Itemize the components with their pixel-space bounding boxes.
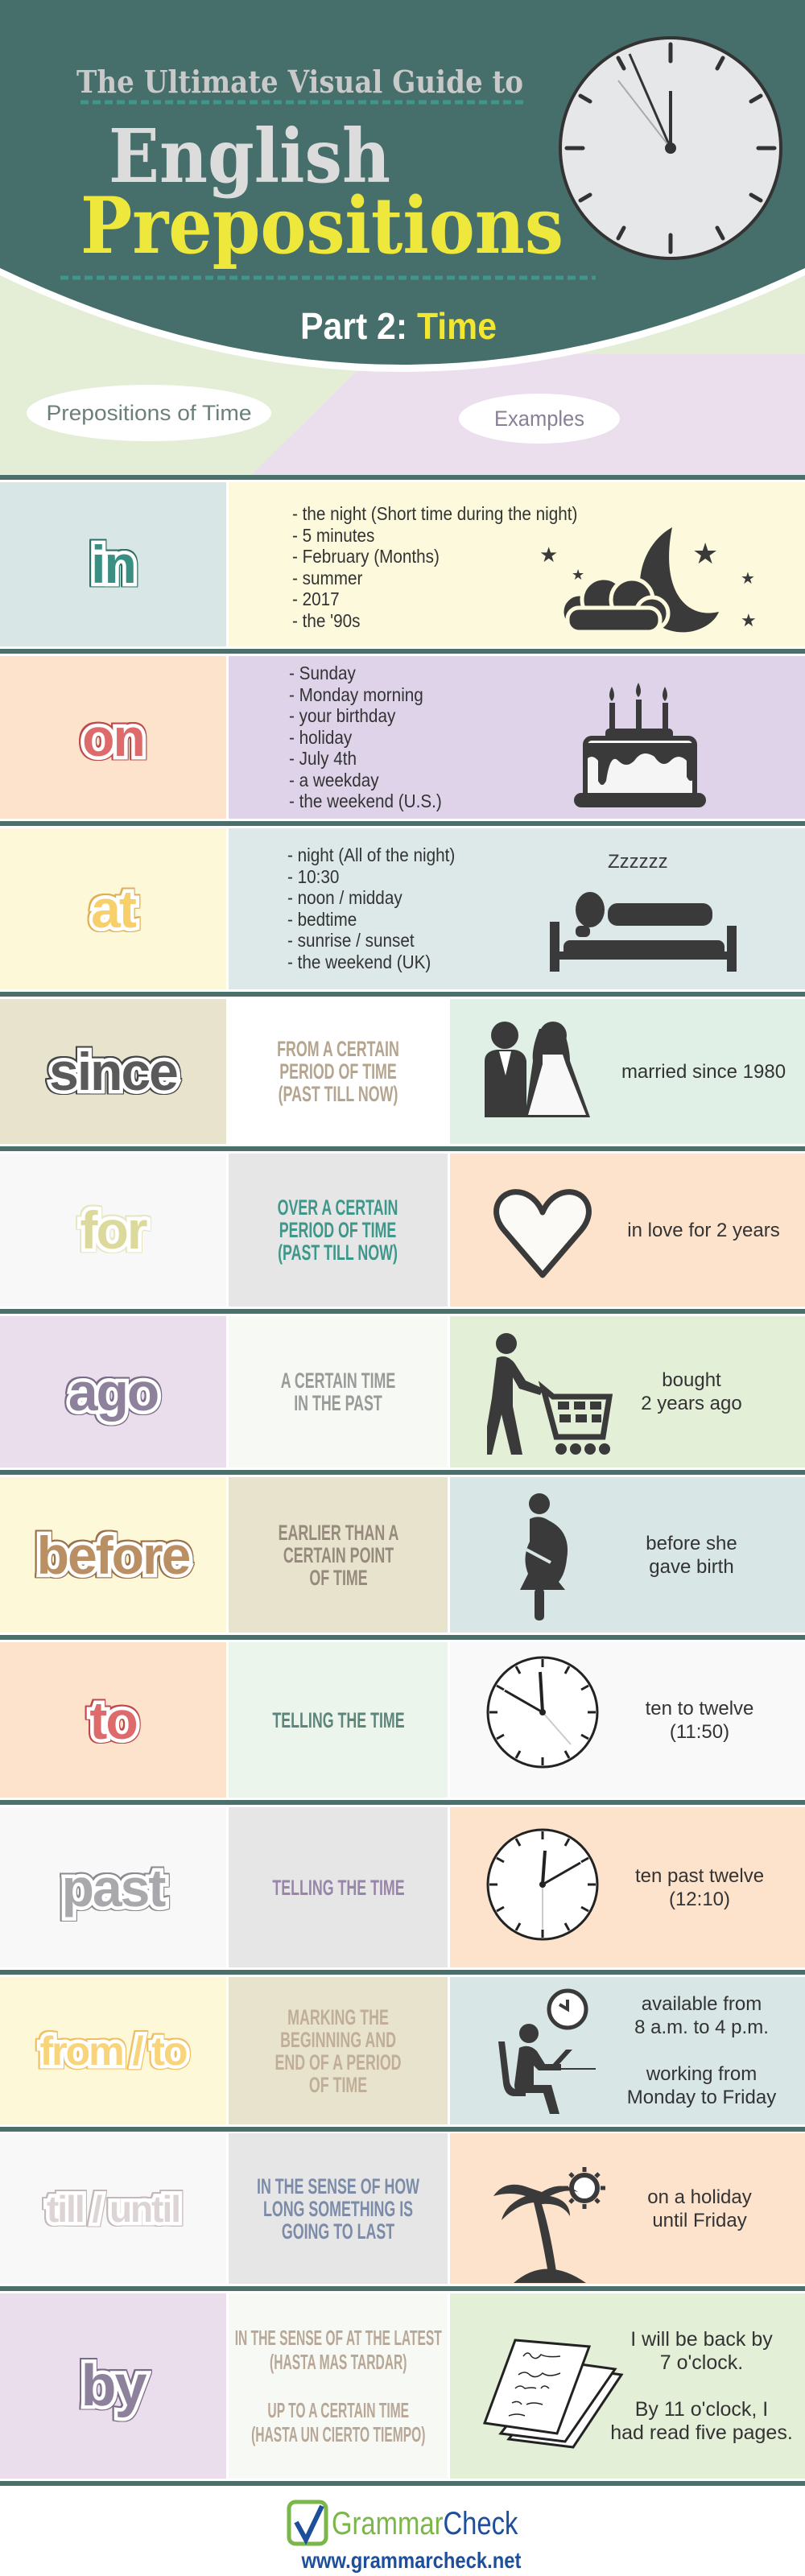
examples list: in: - 2017 bbox=[292, 588, 340, 609]
footer logo bbox=[287, 2500, 522, 2573]
word: at: at bbox=[91, 879, 135, 939]
examples list: at: - noon / midday bbox=[287, 887, 402, 908]
definition: ago: A CERTAIN TIME bbox=[281, 1368, 395, 1393]
definition: for bbox=[229, 1154, 448, 1307]
pill: Examples bbox=[459, 394, 620, 444]
definition: ago: IN THE PAST bbox=[294, 1391, 382, 1415]
example: from / to: working from bbox=[646, 2063, 757, 2085]
row: till / until bbox=[42, 2133, 805, 2284]
word: from / to bbox=[0, 1977, 226, 2124]
definition: till / until: LONG SOMETHING IS bbox=[263, 2196, 413, 2220]
examples list: at: - sunrise / sunset bbox=[287, 930, 415, 951]
brand name: GrammarCheck bbox=[332, 2506, 518, 2541]
row: from / to bbox=[0, 1977, 805, 2124]
definition: till / until bbox=[229, 2133, 448, 2284]
examples list: at: - the weekend (UK) bbox=[287, 952, 431, 972]
icon: man with shopping cart bbox=[487, 1333, 613, 1455]
example: till / until bbox=[450, 2133, 805, 2284]
word: in bbox=[0, 482, 226, 646]
definition: before: OF TIME bbox=[309, 1565, 367, 1589]
example: from / to: Monday to Friday bbox=[627, 2087, 776, 2108]
example: by: 7 o'clock. bbox=[660, 2351, 743, 2373]
example: by: I will be back by bbox=[630, 2328, 773, 2351]
word: by bbox=[0, 2293, 226, 2479]
word: past bbox=[0, 1807, 226, 1967]
example: ago: 2 years ago bbox=[641, 1393, 742, 1414]
row: for bbox=[76, 1154, 805, 1307]
icon: moon and cloud: ★ bbox=[741, 570, 755, 588]
title: English: English bbox=[109, 113, 390, 200]
word: at bbox=[0, 828, 226, 989]
title: Prepositions: Prepositions bbox=[80, 180, 564, 271]
icon: clock 11:50 bbox=[486, 1657, 599, 1768]
example: for bbox=[450, 1154, 805, 1307]
word: from / to: from / to bbox=[40, 2029, 186, 2074]
definition: to: TELLING THE TIME bbox=[272, 1708, 404, 1732]
header bbox=[0, 0, 805, 475]
definition: since: (PAST TILL NOW) bbox=[279, 1082, 398, 1106]
definition: ago bbox=[229, 1316, 448, 1468]
definition: since: FROM A CERTAIN bbox=[277, 1037, 399, 1061]
word: before bbox=[0, 1477, 226, 1633]
definition: before: CERTAIN POINT bbox=[283, 1542, 394, 1567]
example: to bbox=[450, 1642, 805, 1798]
word: ago bbox=[0, 1316, 226, 1468]
examples list: in: - February (Months) bbox=[292, 546, 440, 567]
icon: moon and cloud: ★ bbox=[692, 537, 718, 570]
example: past: ten past twelve bbox=[635, 1864, 764, 1887]
definition: by: (HASTA UN CIERTO TIEMPO) bbox=[251, 2422, 425, 2446]
example: ago bbox=[450, 1316, 805, 1468]
definition: past: TELLING THE TIME bbox=[272, 1876, 404, 1900]
example: before: gave birth bbox=[649, 1555, 734, 1578]
pill: Prepositions of Time: Prepositions of Time bbox=[47, 401, 251, 425]
example: to: (11:50) bbox=[670, 1721, 729, 1742]
examples list: in: - summer bbox=[292, 567, 362, 588]
word: on: on bbox=[82, 708, 144, 767]
pill: Examples: Examples bbox=[494, 407, 584, 431]
word: since: since bbox=[49, 1042, 177, 1101]
example: till / until: until Friday bbox=[652, 2209, 747, 2231]
examples list: at: - bedtime bbox=[287, 908, 357, 929]
examples list: on: - Sunday bbox=[289, 663, 356, 683]
examples list: on: - your birthday bbox=[289, 705, 395, 726]
word: on bbox=[0, 656, 226, 819]
subtitle: Part 2: Time bbox=[300, 305, 497, 347]
definition: since bbox=[229, 999, 448, 1144]
definition: from / to: OF TIME bbox=[309, 2072, 367, 2096]
definition: before bbox=[229, 1477, 448, 1633]
icon: bride and groom bbox=[485, 1022, 590, 1117]
word: for: for bbox=[80, 1200, 146, 1260]
example: till / until: on a holiday bbox=[647, 2186, 752, 2207]
example: before: before she bbox=[646, 1533, 737, 1554]
word: past: past bbox=[62, 1858, 164, 1918]
example: ago: bought bbox=[662, 1369, 721, 1391]
url: www.grammarcheck.net bbox=[301, 2548, 521, 2573]
definition: for: OVER A CERTAIN bbox=[278, 1195, 398, 1220]
definition: from / to: MARKING THE bbox=[287, 2004, 389, 2029]
examples list: in bbox=[229, 482, 805, 646]
examples list: in: - 5 minutes bbox=[292, 525, 374, 546]
title: small: The Ultimate Visual Guide to bbox=[76, 64, 523, 100]
examples list: in: - the '90s bbox=[292, 610, 361, 631]
row: before bbox=[0, 1477, 805, 1633]
example: past bbox=[450, 1807, 805, 1967]
examples list: on: - a weekday bbox=[289, 770, 379, 791]
definition: from / to: BEGINNING AND bbox=[280, 2027, 396, 2051]
word: for bbox=[0, 1154, 226, 1307]
icon: sleeping person in bed bbox=[550, 851, 737, 972]
definition: from / to bbox=[229, 1977, 448, 2124]
row: on bbox=[0, 656, 805, 819]
word: till / until: till / until bbox=[47, 2188, 180, 2230]
definition: for: (PAST TILL NOW) bbox=[279, 1241, 398, 1265]
definition: by bbox=[229, 2293, 448, 2479]
row: by bbox=[0, 2293, 805, 2479]
word: to bbox=[0, 1642, 226, 1798]
examples list: at: - night (All of the night) bbox=[287, 844, 455, 865]
icon: pregnant woman bbox=[520, 1493, 568, 1620]
word: by: by bbox=[80, 2354, 146, 2418]
row: ago bbox=[0, 1316, 805, 1468]
definition: by: UP TO A CERTAIN TIME bbox=[267, 2398, 409, 2422]
word: to: to bbox=[89, 1690, 137, 1750]
definition: past bbox=[229, 1807, 448, 1967]
row: past bbox=[60, 1807, 805, 1967]
definition: till / until: GOING TO LAST bbox=[282, 2219, 394, 2243]
examples list: in: - the night (Short time during the night) bbox=[292, 503, 577, 524]
examples list: at bbox=[229, 828, 805, 989]
icon: moon and cloud bbox=[539, 527, 757, 633]
examples list: on: - holiday bbox=[289, 726, 352, 747]
examples list: on bbox=[229, 656, 805, 819]
example: from / to: 8 a.m. to 4 p.m. bbox=[634, 2017, 769, 2038]
row: in bbox=[0, 482, 805, 646]
example: before bbox=[450, 1477, 805, 1633]
icon: papers bbox=[483, 2339, 623, 2449]
examples list: on: - the weekend (U.S.) bbox=[289, 791, 442, 811]
icon: heart bbox=[493, 1189, 592, 1278]
example: from / to bbox=[450, 1977, 805, 2124]
icon: person at desk with clock bbox=[498, 1988, 596, 2114]
word: since bbox=[0, 999, 226, 1144]
example: to: ten to twelve bbox=[646, 1697, 753, 1719]
example: since: married since 1980 bbox=[621, 1061, 786, 1082]
icon: moon and cloud: ★ bbox=[572, 567, 584, 583]
icon: header clock bbox=[560, 38, 781, 258]
example: by: By 11 o'clock, I bbox=[635, 2397, 768, 2420]
icon: moon and cloud: ★ bbox=[539, 543, 558, 567]
icon: birthday cake bbox=[574, 683, 706, 807]
definition: to bbox=[229, 1642, 448, 1798]
word: in: in bbox=[91, 535, 135, 594]
word: ago: ago bbox=[68, 1362, 158, 1422]
definition: for: PERIOD OF TIME bbox=[279, 1218, 397, 1242]
word: till / until bbox=[0, 2133, 226, 2284]
definition: from / to: END OF A PERIOD bbox=[275, 2050, 402, 2074]
examples list: on: - Monday morning bbox=[289, 684, 423, 705]
icon: clock 12:10 bbox=[486, 1829, 599, 1940]
row: since bbox=[0, 999, 805, 1144]
icon: sleeping person in bed: Zzzzzz bbox=[608, 851, 668, 873]
word: before: before bbox=[37, 1525, 189, 1584]
definition: till / until: IN THE SENSE OF HOW bbox=[257, 2174, 419, 2198]
example: from / to: available from bbox=[642, 1993, 762, 2015]
pill: Prepositions of Time bbox=[27, 385, 271, 441]
example: by bbox=[450, 2293, 805, 2479]
definition: before: EARLIER THAN A bbox=[278, 1520, 398, 1544]
examples list: at: - 10:30 bbox=[287, 866, 339, 887]
example: since bbox=[450, 999, 805, 1144]
example: by: had read five pages. bbox=[610, 2421, 793, 2444]
icon: moon and cloud: ★ bbox=[741, 610, 757, 630]
definition: since: PERIOD OF TIME bbox=[279, 1059, 397, 1084]
definition: by: (HASTA MAS TARDAR) bbox=[270, 2350, 407, 2374]
icon: palm island and sun bbox=[493, 2167, 605, 2283]
examples list: on: - July 4th bbox=[289, 748, 357, 769]
example: for: in love for 2 years bbox=[627, 1219, 780, 1241]
row: to bbox=[0, 1642, 753, 1798]
icon: check box bbox=[287, 2500, 328, 2545]
example: past: (12:10) bbox=[669, 1889, 730, 1909]
row: at bbox=[0, 828, 805, 989]
definition: by: IN THE SENSE OF AT THE LATEST bbox=[234, 2326, 442, 2350]
